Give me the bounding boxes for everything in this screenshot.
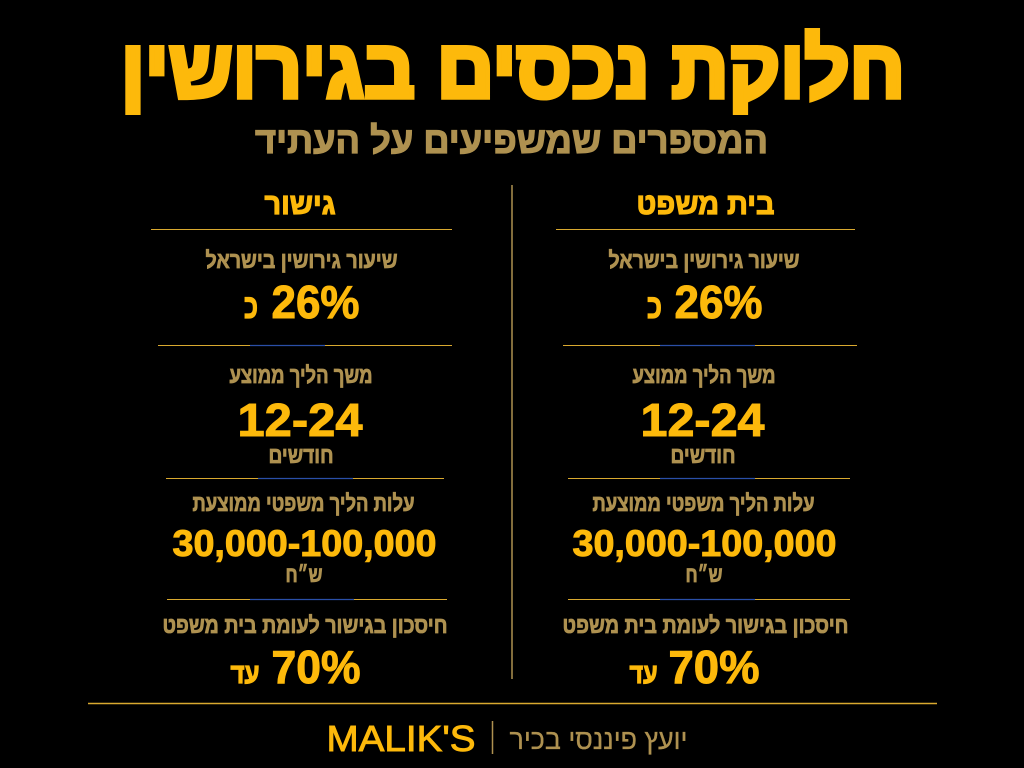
mediation cost stat: ש״ח — [286, 562, 322, 587]
mediation divorce rate stat — [206, 247, 398, 328]
court savings stat: עד — [630, 658, 658, 689]
mediation duration stat — [230, 362, 372, 468]
mediation duration stat: משך הליך ממוצע — [230, 362, 372, 388]
court savings stat: 70% — [668, 641, 760, 693]
mediation cost stat — [172, 490, 436, 587]
panel: court column — [556, 188, 857, 693]
court duration stat: משך הליך ממוצע — [632, 362, 776, 388]
court duration stat — [632, 362, 776, 468]
mediation divorce rate stat: שיעור גירושין בישראל — [206, 247, 398, 273]
court duration stat: 12-24 — [640, 394, 765, 446]
court divorce rate stat: 26% — [674, 276, 762, 328]
mediation savings stat: חיסכון בגישור לעומת בית משפט — [162, 612, 448, 638]
column divider — [511, 185, 513, 679]
court savings stat: חיסכון בגישור לעומת בית משפט — [562, 612, 848, 638]
court cost stat: 30,000-100,000 — [572, 523, 836, 564]
mediation heading: גישור — [264, 188, 336, 221]
court cost stat: עלות הליך משפטי ממוצעת — [592, 490, 814, 516]
court divorce rate stat: שיעור גירושין בישראל — [608, 247, 800, 273]
court cost stat: ש״ח — [686, 562, 722, 587]
title: חלוקת נכסים בגירושין — [121, 24, 905, 115]
mediation cost stat: 30,000-100,000 — [172, 523, 436, 564]
mediation duration stat: 12-24 — [238, 394, 363, 446]
court divorce rate stat — [608, 247, 800, 328]
mediation cost stat: עלות הליך משפטי ממוצעת — [192, 490, 414, 516]
footer brand: MALIK'S — [326, 718, 476, 759]
subtitle: המספרים שמשפיעים על העתיד — [255, 120, 768, 161]
mediation duration stat: חודשים — [268, 442, 334, 468]
court heading: בית משפט — [636, 188, 774, 221]
mediation savings stat — [162, 612, 448, 693]
court divorce rate stat: כ — [647, 288, 662, 326]
panel: mediation column — [151, 188, 452, 693]
mediation savings stat: 70% — [272, 641, 360, 693]
footer brand: יועץ פיננסי בכיר — [510, 724, 688, 755]
mediation savings stat: עד — [230, 658, 260, 689]
mediation divorce rate stat: 26% — [272, 276, 360, 328]
court duration stat: חודשים — [670, 442, 736, 468]
footer brand — [326, 718, 688, 759]
court cost stat — [572, 490, 836, 587]
court savings stat — [562, 612, 848, 693]
mediation divorce rate stat: כ — [244, 288, 258, 326]
